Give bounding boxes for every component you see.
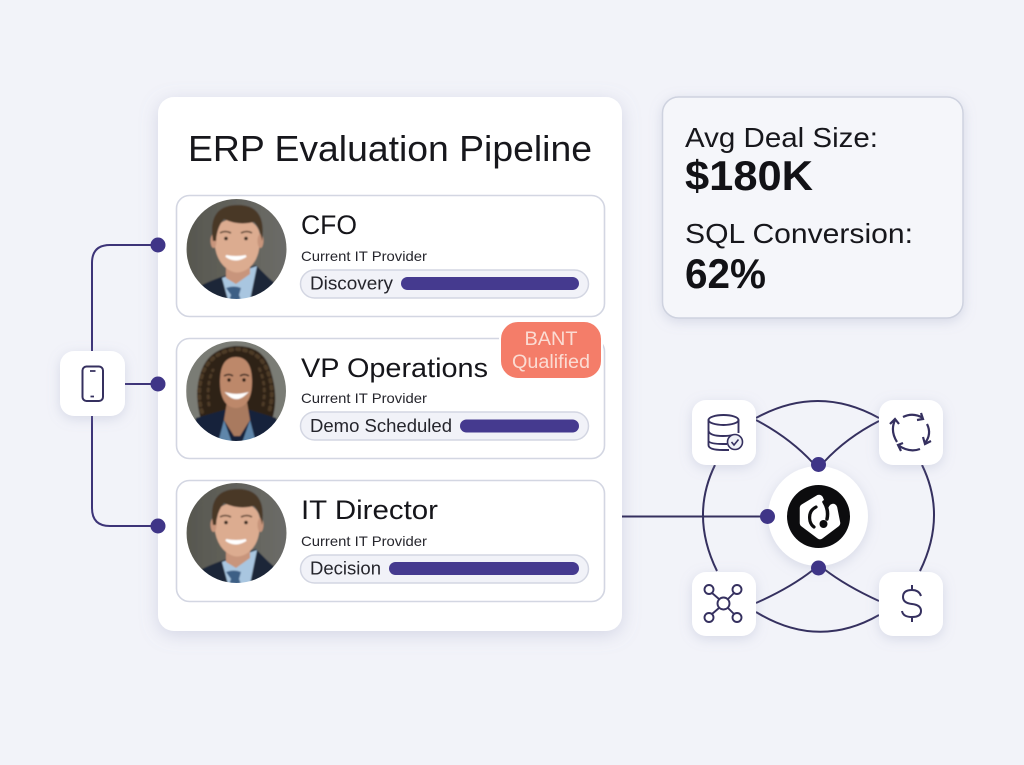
role: IT Director: IT Director	[301, 495, 438, 525]
badge: BANT Qualified	[500, 321, 602, 379]
panel: deal stats	[662, 97, 963, 318]
provider label: Current IT Provider	[301, 533, 427, 549]
icon: dollar	[879, 572, 943, 636]
stage pill: Demo Scheduled: Demo Scheduled	[310, 416, 452, 436]
connector: phone to rows	[92, 245, 158, 526]
badge: BANT Qualified: BANT	[524, 329, 578, 350]
stat label: Avg Deal Size: Avg Deal Size:	[685, 122, 878, 153]
icon: sync arrows	[879, 400, 943, 465]
badge: BANT Qualified: Qualified	[512, 352, 590, 373]
stage pill: Discovery	[300, 270, 588, 298]
node: row 1	[150, 238, 166, 252]
connector lines	[622, 401, 934, 632]
role: VP Operations: VP Operations	[301, 353, 488, 383]
stat value: 62%: 62%	[685, 250, 766, 297]
provider label: Current IT Provider	[301, 248, 427, 264]
provider label: Current IT Provider	[301, 390, 427, 406]
stage pill: Decision	[300, 555, 588, 583]
row: VP Operations	[176, 338, 604, 458]
stage pill: Demo Scheduled	[300, 412, 588, 440]
role: CFO: CFO	[301, 210, 357, 240]
row: IT Director	[176, 480, 604, 602]
panel: pipeline card	[158, 97, 622, 631]
hub nodes	[760, 457, 826, 576]
portrait: CFO	[186, 198, 288, 300]
portrait: IT Director	[186, 482, 288, 584]
icon: phone tile	[60, 351, 125, 416]
stat value: $180K: $180K	[685, 152, 813, 199]
icon: network nodes	[692, 572, 756, 636]
node: row 2	[150, 376, 166, 392]
heading: ERP Evaluation Pipeline: ERP Evaluation Pipeline	[188, 128, 592, 169]
integration hub network	[622, 400, 943, 636]
stage pill: Discovery: Discovery	[310, 274, 393, 294]
portrait: VP Operations	[186, 341, 288, 443]
icon: database	[692, 400, 756, 465]
hub logo	[787, 485, 850, 548]
row: CFO	[176, 196, 604, 316]
hub circle	[768, 466, 868, 566]
stage pill: Decision: Decision	[310, 558, 381, 578]
stat label: SQL Conversion: SQL Conversion:	[685, 218, 913, 249]
node: row 3	[150, 518, 166, 534]
